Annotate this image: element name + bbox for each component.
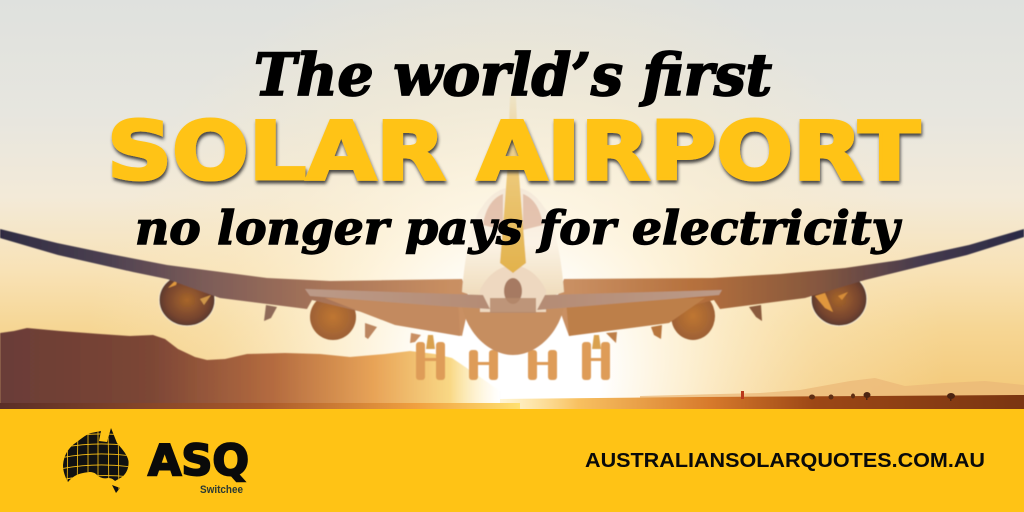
logo wordmark ASQ: ASQ — [148, 436, 249, 486]
engines — [159, 272, 867, 340]
tail fin — [500, 95, 526, 273]
landing gear — [416, 335, 610, 380]
belly — [461, 298, 565, 355]
logo: Australia solar panel icon — [63, 428, 129, 493]
website url: AUSTRALIANSOLARQUOTES.COM.AU — [585, 449, 985, 472]
title line 2: SOLAR AIRPORT — [107, 105, 920, 198]
title line 3: no longer pays for electricity — [135, 201, 902, 255]
footer band — [0, 409, 1024, 512]
fuselage pink panels — [483, 194, 543, 230]
hills left silhouette — [0, 328, 510, 410]
tailplanes — [305, 289, 490, 309]
airplane — [0, 95, 1024, 380]
wing pylons — [264, 305, 762, 343]
rear fuselage cone — [480, 266, 546, 312]
logo sub-brand Switchee: Switchee — [200, 484, 243, 496]
title line 1: The world’s first — [254, 41, 772, 109]
wings — [0, 229, 470, 336]
distant hills right — [640, 378, 1024, 400]
fuselage upper body — [462, 187, 564, 300]
ground strip — [0, 391, 1024, 410]
